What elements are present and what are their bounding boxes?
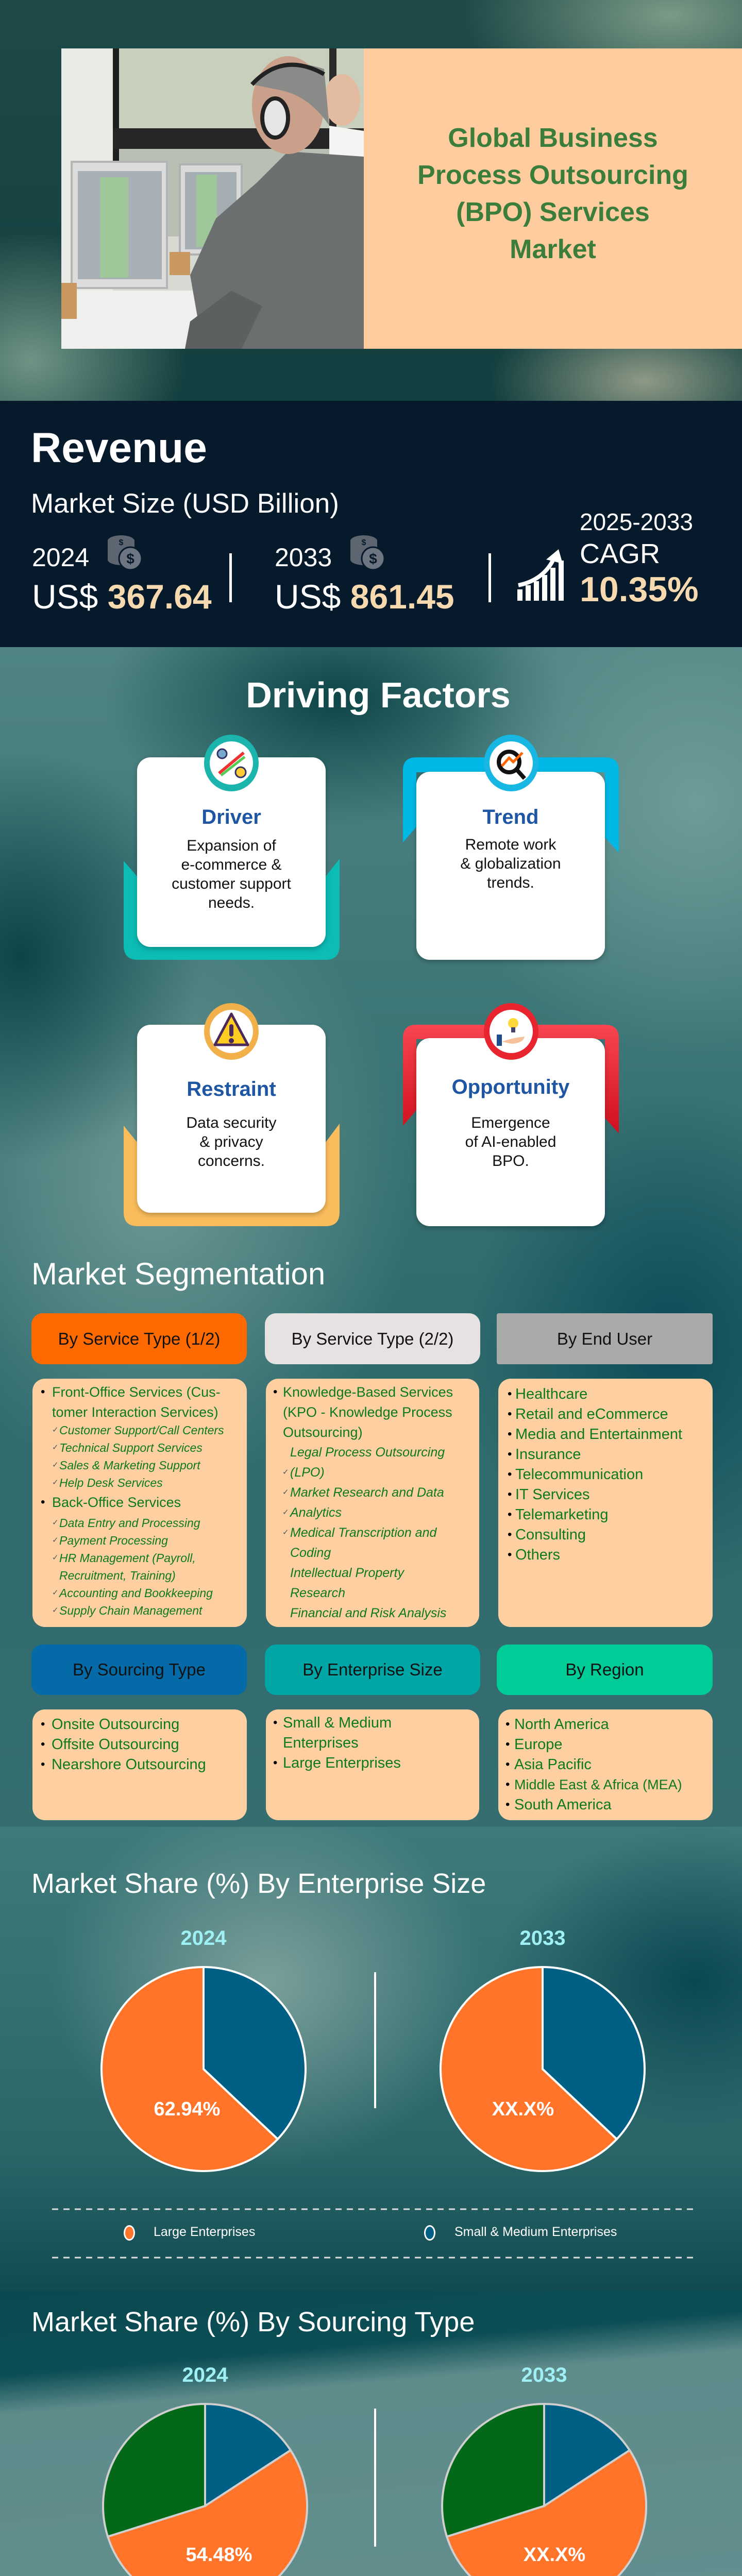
panel: service type 2 list: (LPO) (290, 1465, 325, 1480)
panel: service type 1 list: Customer Support/Call Centers (59, 1423, 224, 1437)
panel: end user list: • (508, 1528, 512, 1541)
panel: service type 1 list: ✓ (52, 1606, 59, 1615)
panel: service type 1 list: • (41, 1385, 45, 1399)
panel: end user list: Healthcare (515, 1386, 587, 1402)
panel: end user list: • (508, 1387, 512, 1401)
panel: service type 1 list: Data Entry and Processing (59, 1516, 200, 1530)
panel: service type 1 list: ✓ (52, 1553, 59, 1562)
card: Restraint (124, 1003, 340, 1226)
label: 2033: 2033 (520, 1927, 565, 1950)
card: Driver: Driver (201, 806, 261, 828)
panel: end user list (498, 1379, 713, 1627)
background: navy revenue band (0, 401, 742, 647)
panel: service type 2 list: Coding (290, 1546, 331, 1560)
panel: service type 1 list: Technical Support Services (59, 1441, 203, 1454)
panel: service type 2 list: ✓ (282, 1488, 289, 1497)
panel: enterprise size list (266, 1709, 479, 1820)
card: Opportunity: Opportunity (452, 1076, 569, 1098)
panel: end user list: Consulting (515, 1527, 586, 1543)
header: By Service Type (2/2) (265, 1313, 480, 1364)
panel: service type 1 list: • (41, 1495, 45, 1509)
stat: CAGR: 10.35% (580, 570, 699, 609)
icon: coins: $ (126, 551, 134, 567)
title panel: Market (510, 234, 596, 264)
title panel: Process Outsourcing (417, 160, 688, 190)
panel: sourcing type list: • (41, 1717, 45, 1731)
icon: coins (350, 535, 383, 569)
card: Driver: customer support (172, 875, 291, 892)
header: By End User (497, 1313, 713, 1364)
panel: sourcing type list (32, 1709, 247, 1820)
card: Opportunity: BPO. (492, 1153, 529, 1170)
card: Driver: Expansion of (187, 837, 276, 854)
legend: enterprise size: Small & Medium Enterprises (454, 2225, 617, 2239)
chart: sourcing type pies (102, 2403, 647, 2576)
card: Trend: trends. (487, 874, 534, 891)
panel: service type 2 list: Outsourcing) (283, 1425, 363, 1440)
panel: service type 1 list: ✓ (52, 1478, 59, 1487)
panel: service type 1 list: ✓ (52, 1518, 59, 1527)
subheading: market size: Market Size (USD Billion) (31, 488, 339, 519)
panel: sourcing type list: Onsite Outsourcing (52, 1716, 179, 1733)
panel: service type 2 list: ✓ (282, 1508, 289, 1517)
title panel (364, 48, 742, 349)
panel: end user list: Telemarketing (515, 1506, 609, 1523)
header: By End User: By End User (557, 1329, 652, 1348)
label: 2024: 2024 (181, 1927, 226, 1950)
stat: 2033: 2033 (275, 543, 332, 572)
stat: 2024 (32, 535, 212, 616)
panel: enterprise size list: Large Enterprises (283, 1755, 401, 1771)
panel: end user list: • (508, 1447, 512, 1461)
legend: enterprise size (124, 2225, 617, 2241)
panel: service type 2 list: Analytics (290, 1505, 342, 1520)
chart: sourcing type pies: XX.X% (524, 2544, 585, 2566)
panel: service type 1 list: Supply Chain Management (59, 1604, 202, 1617)
panel: enterprise size list: Enterprises (283, 1735, 359, 1751)
panel: enterprise size list: • (273, 1716, 277, 1730)
panel: region list: • (505, 1757, 510, 1771)
panel: enterprise size list: • (273, 1756, 277, 1770)
panel: service type 1 list: Sales & Marketing Support (59, 1459, 200, 1472)
panel: end user list: • (508, 1507, 512, 1521)
stat: CAGR: 2025-2033 (580, 509, 693, 535)
panel: sourcing type list: Offsite Outsourcing (52, 1736, 179, 1753)
panel: region list: Middle East & Africa (MEA) (514, 1777, 682, 1792)
card: Trend: Remote work (465, 836, 556, 853)
panel: service type 2 list (266, 1379, 479, 1627)
card: Driver: needs. (208, 894, 255, 911)
stat: CAGR (580, 509, 699, 609)
heading: Market Share By Enterprise Size: Market Share (%) By Enterprise Size (31, 1868, 486, 1899)
panel: region list: Asia Pacific (514, 1756, 592, 1773)
panel: end user list: • (508, 1548, 512, 1562)
heading: Market Segmentation: Market Segmentation (31, 1257, 325, 1291)
icon: coins: $ (369, 551, 377, 567)
panel: region list: • (505, 1777, 510, 1791)
card: Trend (403, 735, 619, 963)
panel: service type 1 list: Payment Processing (59, 1534, 168, 1547)
panel: service type 2 list: ✓ (282, 1468, 289, 1477)
chart: enterprise size pies (52, 1966, 693, 2259)
title panel: Global Business (448, 123, 658, 152)
stat: 2033 (275, 535, 454, 616)
card: Driver: e-commerce & (181, 856, 282, 873)
header: By Sourcing Type: By Sourcing Type (73, 1660, 206, 1679)
panel: region list: • (505, 1798, 510, 1811)
card: Opportunity: Emergence (471, 1114, 550, 1131)
panel: service type 2 list: (KPO - Knowledge Process (283, 1404, 452, 1420)
card: Restraint: concerns. (198, 1153, 265, 1170)
panel: service type 1 list: ✓ (52, 1461, 59, 1469)
panel: region list: • (505, 1737, 510, 1751)
panel: end user list: Insurance (515, 1446, 581, 1463)
panel: sourcing type list: • (41, 1757, 45, 1771)
panel: service type 1 list: ✓ (52, 1588, 59, 1597)
background: sourcing pies (0, 2291, 742, 2576)
panel: service type 2 list: Research (290, 1586, 345, 1600)
header: By Enterprise Size: By Enterprise Size (302, 1660, 443, 1679)
icon: coins (108, 535, 141, 569)
header: By Enterprise Size (265, 1645, 480, 1695)
panel: region list (498, 1709, 713, 1820)
panel: end user list: • (508, 1427, 512, 1441)
header: By Service Type (1/2) (31, 1313, 247, 1364)
panel: service type 1 list: HR Management (Payroll, (59, 1551, 196, 1565)
panel: end user list: • (508, 1407, 512, 1421)
card: Opportunity: of AI-enabled (465, 1133, 556, 1150)
panel: service type 2 list: ✓ (282, 1528, 289, 1537)
panel: sourcing type list: Nearshore Outsourcing (52, 1756, 206, 1773)
header: By Sourcing Type (31, 1645, 247, 1695)
stat: 2033: US$ 861.45 (275, 578, 454, 616)
panel: region list: South America (514, 1797, 612, 1813)
panel: end user list: IT Services (515, 1486, 590, 1503)
card: Opportunity (403, 1003, 619, 1229)
panel: end user list: • (508, 1467, 512, 1481)
stat: 2024: 2024 (32, 543, 89, 572)
icon: growth chart (517, 549, 564, 601)
legend: enterprise size: Large Enterprises (154, 2225, 255, 2239)
panel: service type 2 list: Market Research and Data (290, 1485, 444, 1500)
panel: region list: Europe (514, 1736, 563, 1753)
panel: service type 1 list: Help Desk Services (59, 1476, 163, 1489)
panel: end user list: Telecommunication (515, 1466, 643, 1483)
panel: service type 1 list: Front-Office Services (Cus- (52, 1384, 221, 1400)
header: By Region: By Region (565, 1660, 644, 1679)
header: By Region (497, 1645, 713, 1695)
stat: 2024: US$ 367.64 (32, 578, 212, 616)
icon: coins: $ (362, 538, 366, 547)
chart: enterprise size pies: XX.X% (492, 2098, 554, 2120)
panel: service type 1 list: ✓ (52, 1443, 59, 1452)
header: By Service Type (2/2): By Service Type (2/2) (292, 1329, 453, 1348)
panel: service type 1 list: Back-Office Services (52, 1495, 181, 1510)
panel: end user list: Media and Entertainment (515, 1426, 682, 1443)
panel: region list: North America (514, 1716, 609, 1733)
panel: service type 1 list: tomer Interaction Services) (52, 1404, 218, 1420)
panel: service type 1 list: Recruitment, Training) (59, 1569, 176, 1582)
icon: trend (484, 735, 538, 791)
label: 2024: 2024 (182, 2364, 228, 2386)
panel: sourcing type list: • (41, 1737, 45, 1751)
label: 2033: 2033 (521, 2364, 567, 2386)
panel: service type 2 list: Medical Transcription and (290, 1526, 436, 1540)
chart: sourcing type pies: 54.48% (186, 2544, 252, 2566)
panel: enterprise size list: Small & Medium (283, 1715, 392, 1731)
icon: driver (204, 735, 259, 791)
chart: enterprise size pies: 62.94% (154, 2098, 220, 2120)
icon: warning (204, 1003, 259, 1060)
panel: region list: • (505, 1717, 510, 1731)
panel: service type 2 list: • (273, 1385, 277, 1399)
card: Restraint: Data security (186, 1114, 277, 1131)
icon: coins: $ (119, 538, 124, 547)
card: Trend: & globalization (460, 855, 561, 872)
panel: service type 2 list: Knowledge-Based Services (283, 1384, 453, 1400)
panel: end user list: Others (515, 1547, 560, 1563)
background: teal middle (0, 647, 742, 1827)
background: top blurred header (0, 0, 742, 401)
header: By Service Type (1/2): By Service Type (1/2) (58, 1329, 220, 1348)
panel: end user list: Retail and eCommerce (515, 1406, 668, 1422)
panel: service type 2 list: Financial and Risk Analysis (290, 1606, 446, 1620)
card: Driver (124, 735, 340, 960)
panel: service type 2 list: Intellectual Property (290, 1566, 404, 1580)
heading: Driving Factors: Driving Factors (246, 675, 511, 715)
title panel: (BPO) Services (456, 197, 650, 227)
panel: service type 1 list: ✓ (52, 1426, 59, 1434)
panel: service type 2 list: Legal Process Outsourcing (290, 1445, 445, 1460)
panel: end user list: • (508, 1487, 512, 1501)
panel: service type 1 list: Accounting and Bookkeeping (59, 1586, 213, 1600)
card: Trend: Trend (483, 806, 538, 828)
panel: service type 1 list (32, 1379, 247, 1627)
heading: Revenue: Revenue (31, 425, 207, 471)
heading: Market Share By Sourcing Type: Market Share (%) By Sourcing Type (31, 2307, 475, 2337)
background: enterprise pies (0, 1827, 742, 2291)
icon: idea hand (484, 1003, 538, 1060)
card: Restraint: & privacy (199, 1133, 263, 1150)
card: Restraint: Restraint (187, 1078, 276, 1100)
panel: service type 1 list: ✓ (52, 1536, 59, 1545)
stat: CAGR: CAGR (580, 538, 660, 569)
hero photo: call center agent (61, 48, 364, 349)
